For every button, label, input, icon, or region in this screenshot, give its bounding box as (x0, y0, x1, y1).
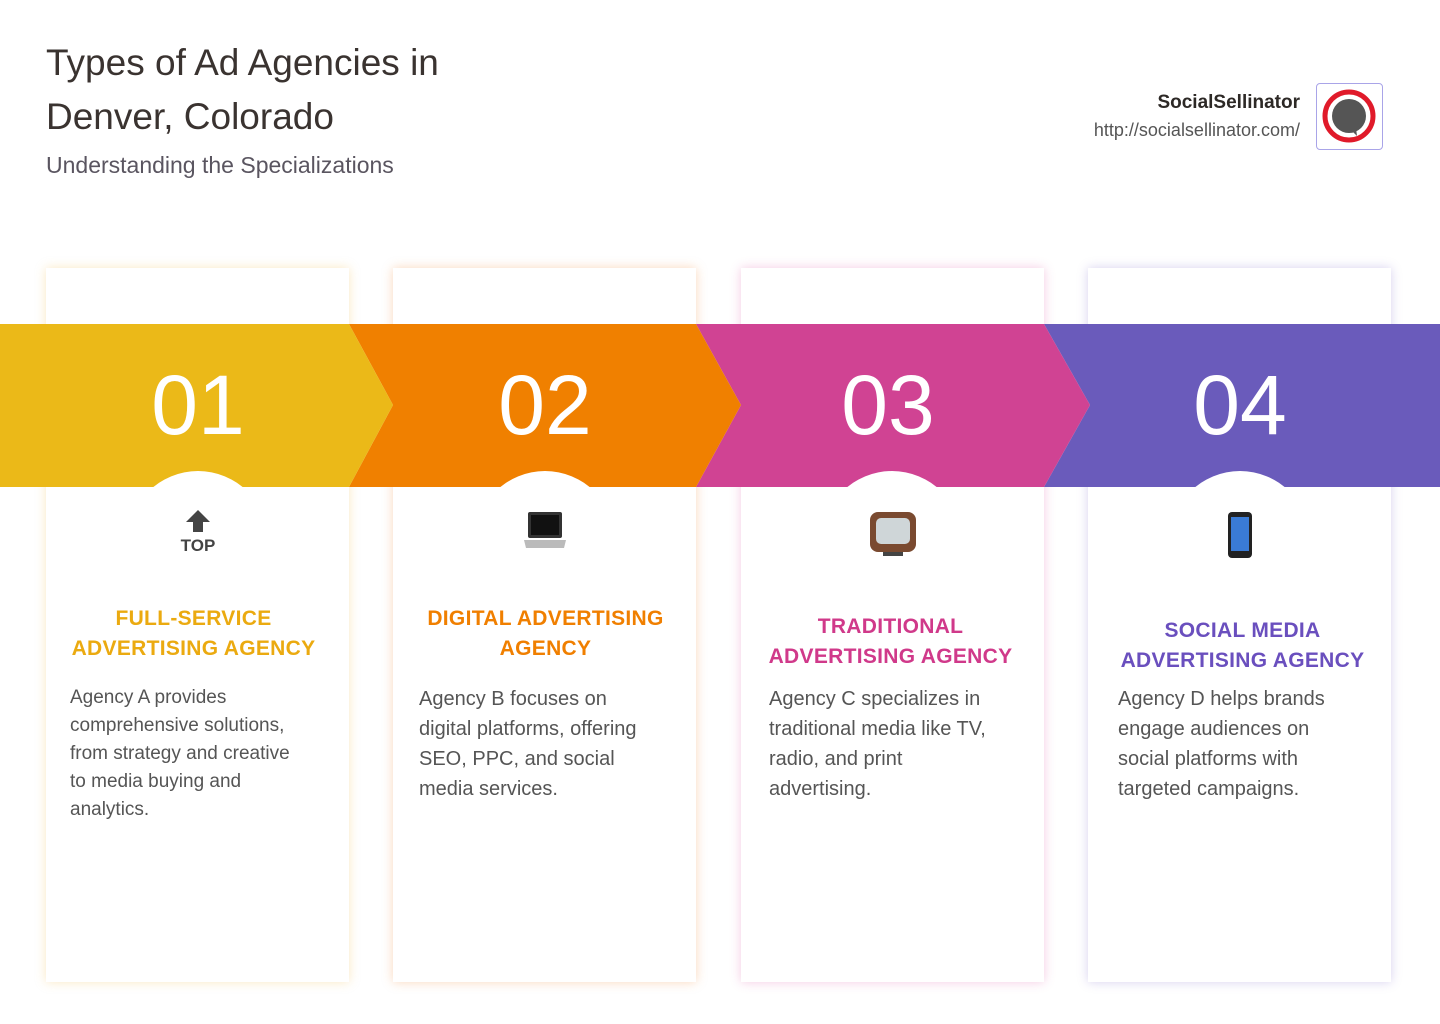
text 1: analytics. (70, 799, 149, 820)
title: Types of Ad Agencies in (46, 42, 439, 83)
text 1: comprehensive solutions, (70, 715, 284, 736)
text 2: digital platforms, offering (419, 718, 637, 740)
text 4 (1118, 688, 1325, 800)
heading 3: ADVERTISING AGENCY (769, 645, 1012, 668)
brand (1094, 92, 1300, 140)
heading 2: DIGITAL ADVERTISING (427, 607, 664, 630)
icon: top arrow (180, 510, 215, 555)
text 1 (70, 687, 290, 820)
heading 1: FULL-SERVICE (115, 607, 272, 630)
text 3: advertising. (769, 778, 871, 800)
arrow band: 01 (151, 358, 245, 452)
logo (1316, 83, 1383, 150)
text 4: engage audiences on (1118, 718, 1309, 740)
heading 4: SOCIAL MEDIA (1164, 619, 1321, 642)
title (46, 42, 439, 137)
icon: top arrow: TOP (180, 536, 215, 555)
text 1: to media buying and (70, 771, 241, 792)
heading 2: AGENCY (500, 637, 591, 660)
arrow band: 03 (841, 358, 935, 452)
heading 3: TRADITIONAL (818, 615, 963, 638)
text 3: traditional media like TV, (769, 718, 986, 740)
brand: http://socialsellinator.com/ (1094, 120, 1300, 140)
heading 1 (72, 607, 315, 660)
card 3 (741, 268, 1044, 982)
subtitle: Understanding the Specializations (46, 152, 394, 178)
heading 1: ADVERTISING AGENCY (72, 637, 315, 660)
card 4 (1088, 268, 1391, 982)
arrow band: 04 (1193, 358, 1287, 452)
text 4: targeted campaigns. (1118, 778, 1299, 800)
text 4: Agency D helps brands (1118, 688, 1325, 710)
arrow band: 02 (498, 358, 592, 452)
heading 4 (1121, 619, 1364, 672)
icon: tv (870, 512, 916, 556)
text 3 (769, 688, 986, 800)
title: Denver, Colorado (46, 96, 334, 137)
text 2: SEO, PPC, and social (419, 748, 615, 770)
icon: phone (1228, 512, 1252, 558)
text 1: Agency A provides (70, 687, 226, 708)
text 3: radio, and print (769, 748, 902, 770)
icon: laptop (524, 512, 566, 548)
text 2: Agency B focuses on (419, 688, 607, 710)
card 1 (46, 268, 349, 982)
heading 3 (769, 615, 1012, 668)
text 1: from strategy and creative (70, 743, 290, 764)
heading 4: ADVERTISING AGENCY (1121, 649, 1364, 672)
heading 2 (427, 607, 664, 660)
card 2 (393, 268, 696, 982)
text 3: Agency C specializes in (769, 688, 980, 710)
text 2 (419, 688, 637, 800)
text 4: social platforms with (1118, 748, 1298, 770)
brand: SocialSellinator (1157, 92, 1300, 113)
text 2: media services. (419, 778, 558, 800)
